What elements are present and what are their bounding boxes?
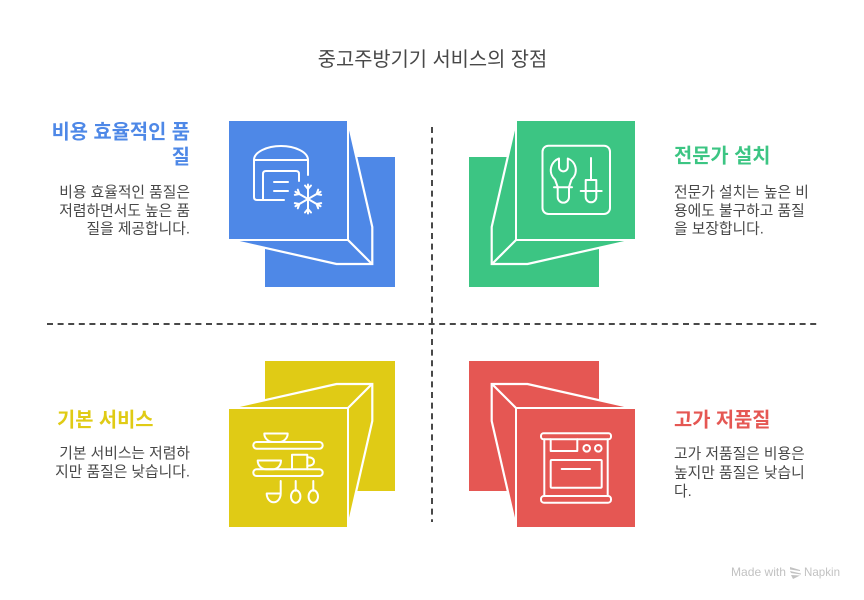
text block: cost-efficient quality: 질을 제공합니다. [86, 221, 190, 238]
heading: basic service: 기본 서비스 [57, 410, 154, 432]
text block: basic service: 기본 서비스는 저렴하 [59, 445, 190, 462]
icon: oven [541, 433, 611, 503]
text block: cost-efficient quality: 비용 효율적인 품질은 [59, 184, 190, 201]
panel: cost-efficient quality box [229, 121, 395, 287]
text block: high price low quality [674, 446, 805, 500]
heading: professional installation: 전문가 설치 [674, 146, 770, 168]
heading: high price low quality: 고가 저품질 [674, 410, 770, 432]
title: 중고주방기기 서비스의 장점 [318, 49, 547, 71]
text block: professional installation: 용에도 불구하고 품질 [674, 202, 805, 219]
text block: basic service: 지만 품질은 낮습니다. [55, 464, 190, 480]
icon: kitchen shelves with bowls, cup and utensils [253, 434, 323, 503]
panel: basic service box [229, 361, 395, 527]
footer: Made with Napkin [731, 565, 840, 579]
text block: professional installation [674, 184, 809, 238]
text block: professional installation: 전문가 설치는 높은 비 [674, 184, 809, 201]
heading: cost-efficient quality [52, 122, 190, 168]
text block: cost-efficient quality: 저렴하면서도 높은 품 [59, 202, 190, 219]
text block: basic service [55, 445, 190, 480]
text block: high price low quality: 고가 저품질은 비용은 [674, 446, 805, 463]
text block: high price low quality: 높지만 품질은 낮습니 [674, 464, 805, 481]
footer: Made with Napkin: Made with [731, 565, 786, 579]
horizontal dashed divider [47, 323, 817, 325]
icon: garage freezer with snowflake [254, 146, 322, 214]
panel: high price low quality box [469, 361, 635, 527]
text block: cost-efficient quality [59, 184, 190, 238]
heading: cost-efficient quality: 질 [172, 146, 190, 168]
footer: Made with Napkin: Napkin [804, 565, 840, 579]
text block: professional installation: 을 보장합니다. [674, 221, 764, 238]
icon: wrench and screwdriver [542, 146, 610, 214]
vertical dashed divider [431, 127, 433, 522]
heading: cost-efficient quality: 비용 효율적인 품 [52, 122, 190, 144]
text block: high price low quality: 다. [674, 483, 692, 500]
panel: professional installation box [469, 121, 635, 287]
